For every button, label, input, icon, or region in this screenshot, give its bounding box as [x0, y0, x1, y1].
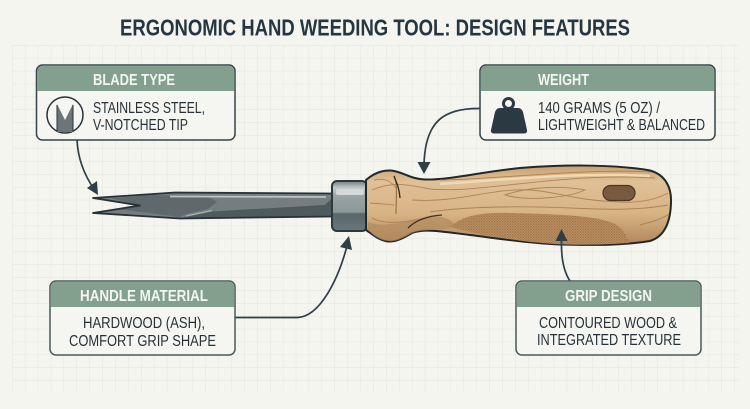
text: weight: [538, 100, 705, 134]
blade: [93, 192, 333, 218]
grip texture: [450, 213, 629, 245]
heading: handle material: [51, 282, 234, 307]
finger slot: [603, 186, 635, 200]
heading: blade type: [37, 66, 234, 91]
arrow: blade type to tip: [77, 140, 98, 195]
text: blade type: [93, 100, 205, 134]
text: grip design: [537, 315, 681, 349]
arrow: weight to handle: [418, 108, 480, 174]
wood grain: [370, 171, 669, 225]
heading: grip design: [517, 282, 700, 307]
text: weight: LIGHTWEIGHT & BALANCED: [538, 117, 705, 134]
arrow: grip design to grip: [556, 229, 570, 281]
icon: weight: [491, 98, 527, 134]
heading: grip design: GRIP DESIGN: [565, 288, 652, 305]
panel: blade type: [36, 65, 235, 140]
text: handle material: COMFORT GRIP SHAPE: [69, 333, 216, 350]
arrow: handle material to ferrule: [235, 236, 352, 318]
heading: weight: WEIGHT: [538, 72, 589, 89]
icon: v-notched blade: [47, 97, 83, 133]
handle: [366, 166, 671, 245]
panel: grip design: [516, 281, 701, 355]
text: handle material: [69, 315, 216, 350]
heading: handle material: HANDLE MATERIAL: [80, 288, 208, 305]
ferrule: [332, 181, 367, 231]
heading: blade type: BLADE TYPE: [93, 72, 175, 89]
panel: handle material: [50, 281, 235, 355]
text: handle material: HARDWOOD (ASH),: [83, 315, 205, 332]
text: grip design: INTEGRATED TEXTURE: [537, 332, 681, 349]
text: grip design: CONTOURED WOOD &: [539, 315, 677, 332]
tool: hand weeder: [93, 166, 671, 245]
title: ERGONOMIC HAND WEEDING TOOL: DESIGN FEATURES: [120, 14, 630, 40]
text: blade type: V-NOTCHED TIP: [93, 117, 188, 134]
panel: weight: [480, 65, 715, 140]
text: blade type: STAINLESS STEEL,: [93, 100, 205, 117]
heading: weight: [481, 66, 714, 91]
lower shading: [368, 216, 455, 241]
text: weight: 140 GRAMS (5 OZ) /: [538, 100, 660, 117]
